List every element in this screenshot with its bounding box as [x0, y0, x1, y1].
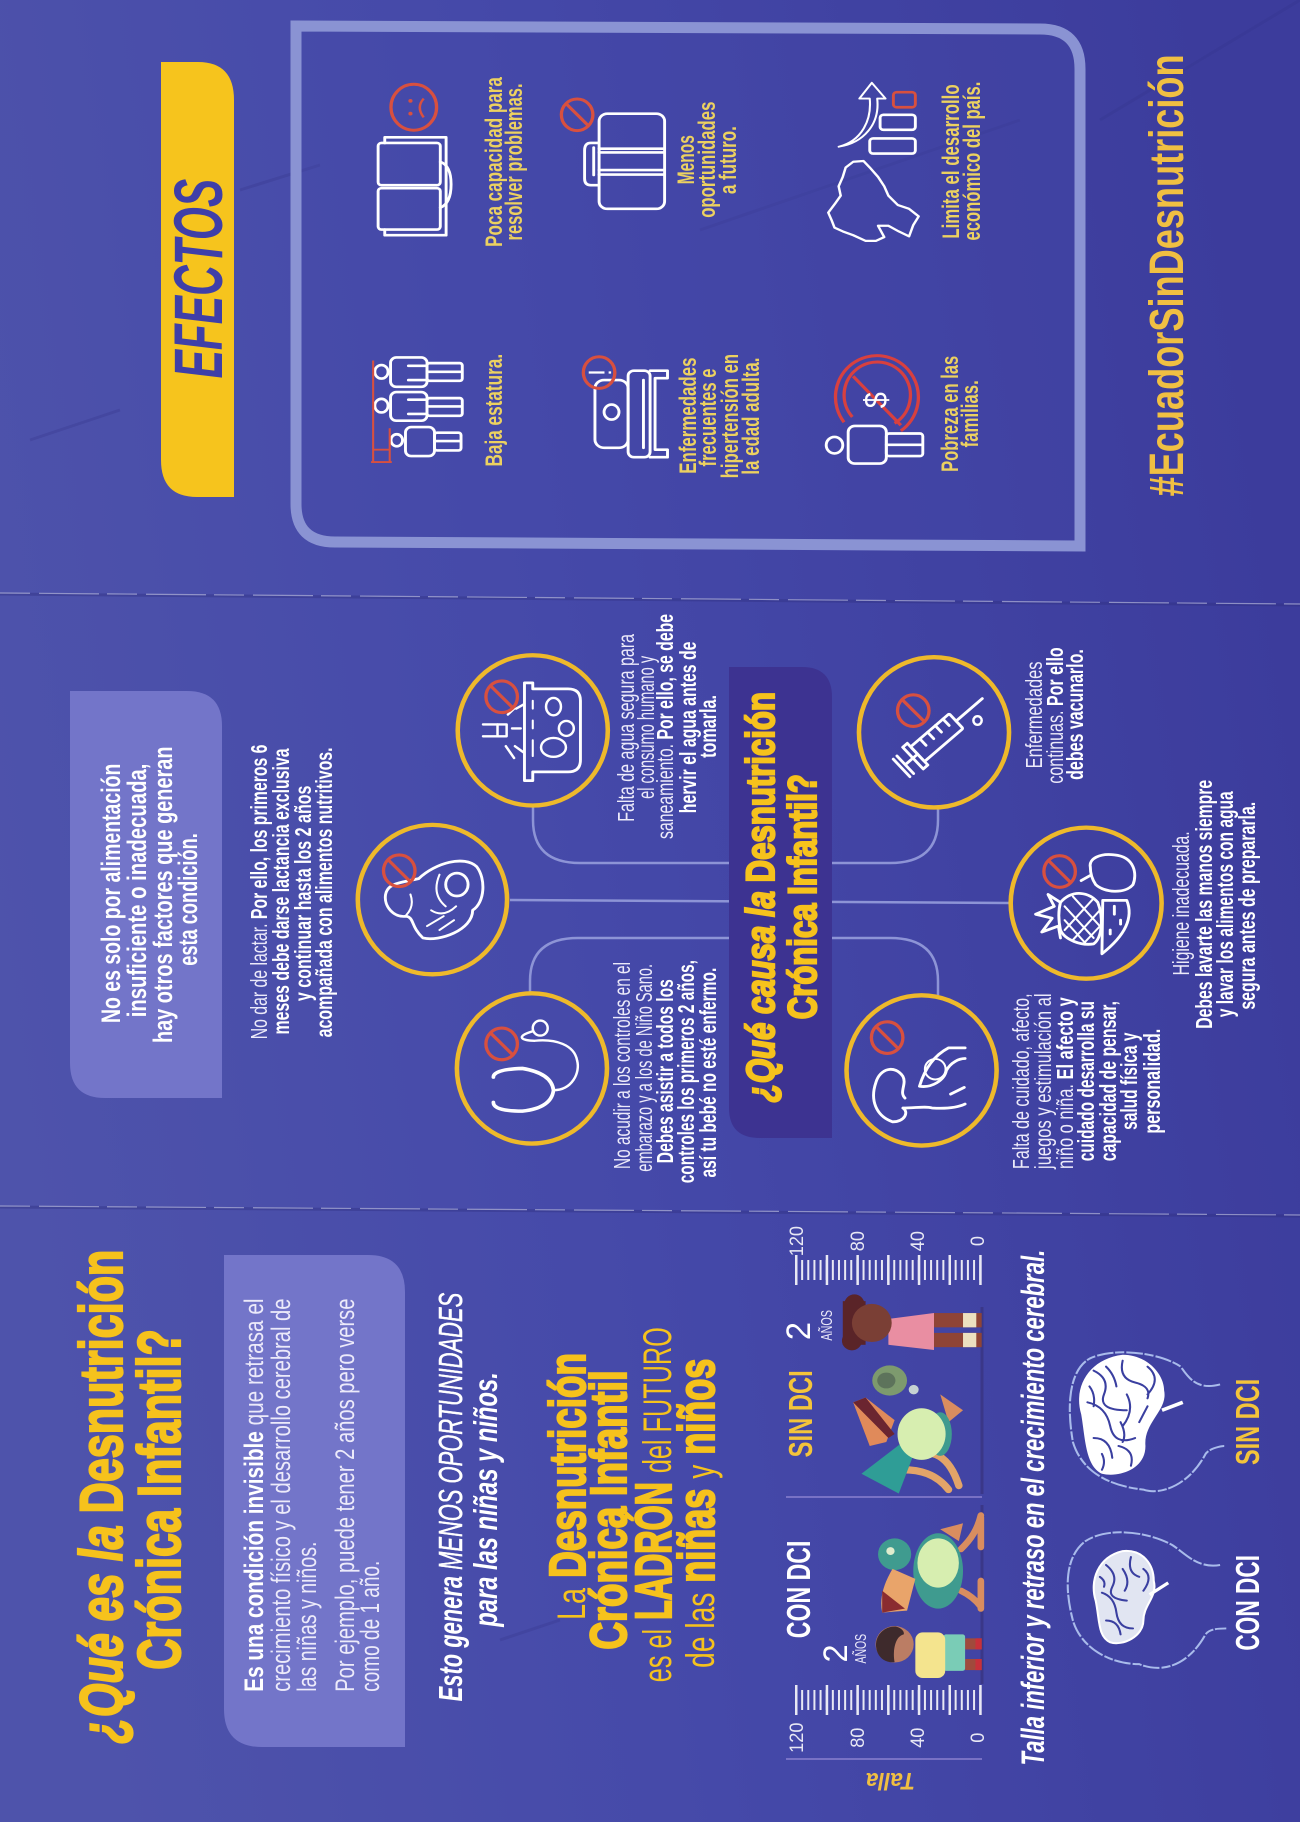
effects labels: frecuentes e	[694, 368, 721, 466]
icon: mother and baby	[847, 995, 997, 1146]
text: agua segura: Falta de agua segura para	[614, 634, 639, 822]
text: menos oportunidades: para las niñas y niños.	[467, 1372, 504, 1627]
callout: no es solo por alimentacion: insuficiente o inadecuada,	[121, 764, 152, 1017]
panel: que es	[69, 1226, 1266, 1794]
effects labels: familias.	[956, 380, 983, 447]
height chart comparison	[780, 1226, 988, 1759]
label: talla: Talla	[866, 1767, 915, 1794]
labels: brain comparison: SIN DCI	[1229, 1379, 1266, 1465]
text: menos oportunidades	[432, 1292, 504, 1701]
connector lines	[510, 805, 1010, 995]
text: no dar de lactar: meses debe darse lactancia exclusiva	[269, 748, 294, 1034]
ruler: right: 80	[847, 1231, 868, 1251]
title	[69, 1250, 193, 1743]
text: afecto: capacidad de pensar,	[1096, 1001, 1121, 1161]
illustration: brain sin dci	[1070, 1352, 1224, 1491]
illustration: girl	[842, 1294, 982, 1350]
heading: que causa: Crónica Infantil?	[781, 774, 825, 1019]
text: agua segura	[614, 614, 721, 839]
text: controles: controles los primeros 2 años,	[674, 960, 699, 1183]
callout: no es solo por alimentacion: esta condición.	[172, 833, 203, 966]
heading: el ladron del futuro: Crónica Infantil	[580, 1370, 637, 1650]
text: no dar de lactar: No dar de lactar. Por ello, los primeros 6	[247, 745, 272, 1039]
text: controles: Debes asistir a todos los	[653, 979, 678, 1163]
ruler: right: 120	[786, 1226, 807, 1256]
icon: fruit	[1011, 828, 1162, 979]
title: Crónica Infantil?	[127, 1329, 193, 1670]
effects labels	[480, 77, 985, 478]
title: ¿Qué es la Desnutrición	[69, 1250, 135, 1743]
text: higiene: Debes lavarte las manos siempre	[1192, 780, 1217, 1029]
labels: brain comparison: CON DCI	[1229, 1555, 1266, 1651]
text: controles	[610, 960, 721, 1183]
callout: definicion: las niñas y niños.	[291, 1542, 322, 1692]
icon: syringe	[859, 657, 1009, 807]
labels: con dci and sin dci	[780, 1310, 870, 1664]
ruler: right: 0	[967, 1236, 988, 1246]
text: vacunas: debes vacunarlo.	[1063, 649, 1088, 780]
heading: el ladron del futuro: es el LADRÓN del FUTURO	[625, 1327, 682, 1682]
text: no dar de lactar	[247, 745, 337, 1039]
icon: water and food	[458, 655, 608, 805]
icon: stethoscope	[457, 993, 607, 1144]
panel: efectos	[159, 26, 1193, 546]
callout: no es solo por alimentacion	[70, 691, 222, 1098]
effects labels: Poca capacidad para	[480, 77, 507, 247]
effects labels: a futuro.	[714, 126, 741, 194]
effects labels: Pobreza en las	[936, 356, 963, 472]
callout: definicion: crecimiento físico y el desarrollo cerebral de	[265, 1299, 296, 1692]
effects labels: Menos	[672, 135, 699, 184]
ruler: right	[786, 1226, 988, 1270]
illustration: toucan sin dci	[853, 1365, 963, 1494]
illustration: brain con dci	[1068, 1532, 1226, 1668]
ruler: right: 40	[907, 1231, 928, 1251]
labels: con dci and sin dci: 2	[817, 1644, 855, 1663]
icon: people of different height	[371, 357, 462, 462]
ruler: left: 120	[786, 1723, 807, 1753]
text: vacunas: continuas. Por ello	[1043, 647, 1068, 784]
labels: con dci and sin dci: 2	[780, 1322, 818, 1340]
text: agua segura: el consumo humano y	[634, 655, 659, 799]
icon: growth chart and Ecuador map	[828, 83, 919, 241]
heading: el ladron del futuro: de las niñas y niños	[668, 1359, 725, 1668]
ruler: left	[786, 1700, 988, 1753]
text: agua segura: hervir el agua antes de	[676, 642, 701, 813]
heading tab: efectos	[159, 62, 237, 497]
text: controles: No acudir a los controles en el	[610, 962, 635, 1169]
text: afecto: personalidad.	[1140, 1029, 1165, 1134]
heading: el ladron del futuro	[539, 1327, 725, 1682]
heading tab: efectos: EFECTOS	[159, 179, 237, 378]
callout: no es solo por alimentacion: No es solo por alimentación	[95, 764, 126, 1023]
icon: open book with sad face	[378, 84, 451, 235]
text: vacunas	[1022, 647, 1088, 784]
effects labels: Limita el desarrollo	[937, 84, 964, 239]
effects labels: oportunidades	[693, 102, 720, 218]
text: menos oportunidades: Esto genera MENOS OPORTUNIDADES	[432, 1292, 469, 1701]
labels: brain comparison	[1229, 1379, 1266, 1651]
callout: no es solo por alimentacion: hay otros factores que generan	[147, 746, 178, 1043]
text: afecto: salud física y	[1117, 1032, 1142, 1130]
text: no dar de lactar: acompañada con alimentos nutritivos.	[312, 747, 337, 1037]
icon: briefcase with prohibition	[561, 99, 665, 209]
effects frame	[296, 26, 1080, 546]
labels: con dci and sin dci: AÑOS	[816, 1310, 836, 1341]
text: higiene: segura antes de prepararla.	[1235, 802, 1260, 1010]
icon: bed with warning	[583, 357, 668, 457]
text: agua segura: tomarla.	[696, 695, 721, 758]
effects labels: Enfermedades	[674, 358, 701, 474]
text: afecto: Falta de cuidado, afecto,	[1009, 993, 1034, 1169]
icon: breastfeeding	[358, 825, 507, 974]
effects labels: económico del país.	[958, 82, 985, 240]
heading: que causa: ¿Qué causa la Desnutrición	[739, 692, 783, 1102]
text: higiene: Higiene inadecuada.	[1169, 831, 1194, 975]
effects labels: $	[859, 392, 894, 408]
effects labels: hipertensión en	[716, 354, 743, 478]
ruler: left: 40	[907, 1728, 928, 1748]
labels: con dci and sin dci: CON DCI	[780, 1541, 817, 1638]
text: afecto: juegos y estimulación al	[1031, 993, 1056, 1170]
text: agua segura: saneamiento. Por ello, se debe	[653, 614, 678, 839]
panel: causas	[70, 614, 1260, 1183]
callout: definicion: Es una condición invisible que retrasa el	[238, 1299, 269, 1692]
labels: con dci and sin dci: SIN DCI	[782, 1370, 819, 1457]
illustration: toucan con dci	[878, 1515, 981, 1613]
text: higiene: y lavar los alimentos con agua	[1213, 791, 1238, 1017]
ruler: left: 80	[847, 1728, 868, 1748]
effects labels: la edad adulta.	[737, 358, 764, 475]
ruler: left: 0	[967, 1733, 988, 1743]
text: afecto	[1009, 993, 1165, 1170]
icon: poverty person with crossed dollar	[826, 356, 923, 464]
effects labels: Baja estatura.	[480, 354, 507, 466]
callout: definicion	[224, 1255, 405, 1747]
illustration: boy	[876, 1626, 982, 1678]
callout: definicion: Por ejemplo, puede tener 2 años pero verse	[329, 1299, 360, 1692]
heading: el ladron del futuro: La Desnutrición	[539, 1353, 596, 1620]
text: afecto: cuidado desarrolla su	[1074, 1001, 1099, 1161]
text: higiene	[1169, 780, 1260, 1029]
text: vacunas: Enfermedades	[1022, 662, 1047, 768]
caption: talla inferior: Talla inferior y retraso en el crecimiento cerebral.	[1015, 1250, 1051, 1765]
callout: definicion: como de 1 año.	[354, 1561, 385, 1692]
text: controles: así tu bebé no esté enfermo.	[696, 968, 721, 1178]
labels: con dci and sin dci: AÑOS	[850, 1634, 870, 1664]
text: controles: embarazo y a los de Niño Sano.	[632, 964, 657, 1172]
text: no dar de lactar: y continuar hasta los 2 años	[291, 786, 316, 1001]
text: afecto: niño o niña. El afecto y	[1053, 997, 1078, 1169]
heading: que causa	[729, 667, 832, 1138]
effects labels: resolver problemas.	[500, 83, 527, 240]
